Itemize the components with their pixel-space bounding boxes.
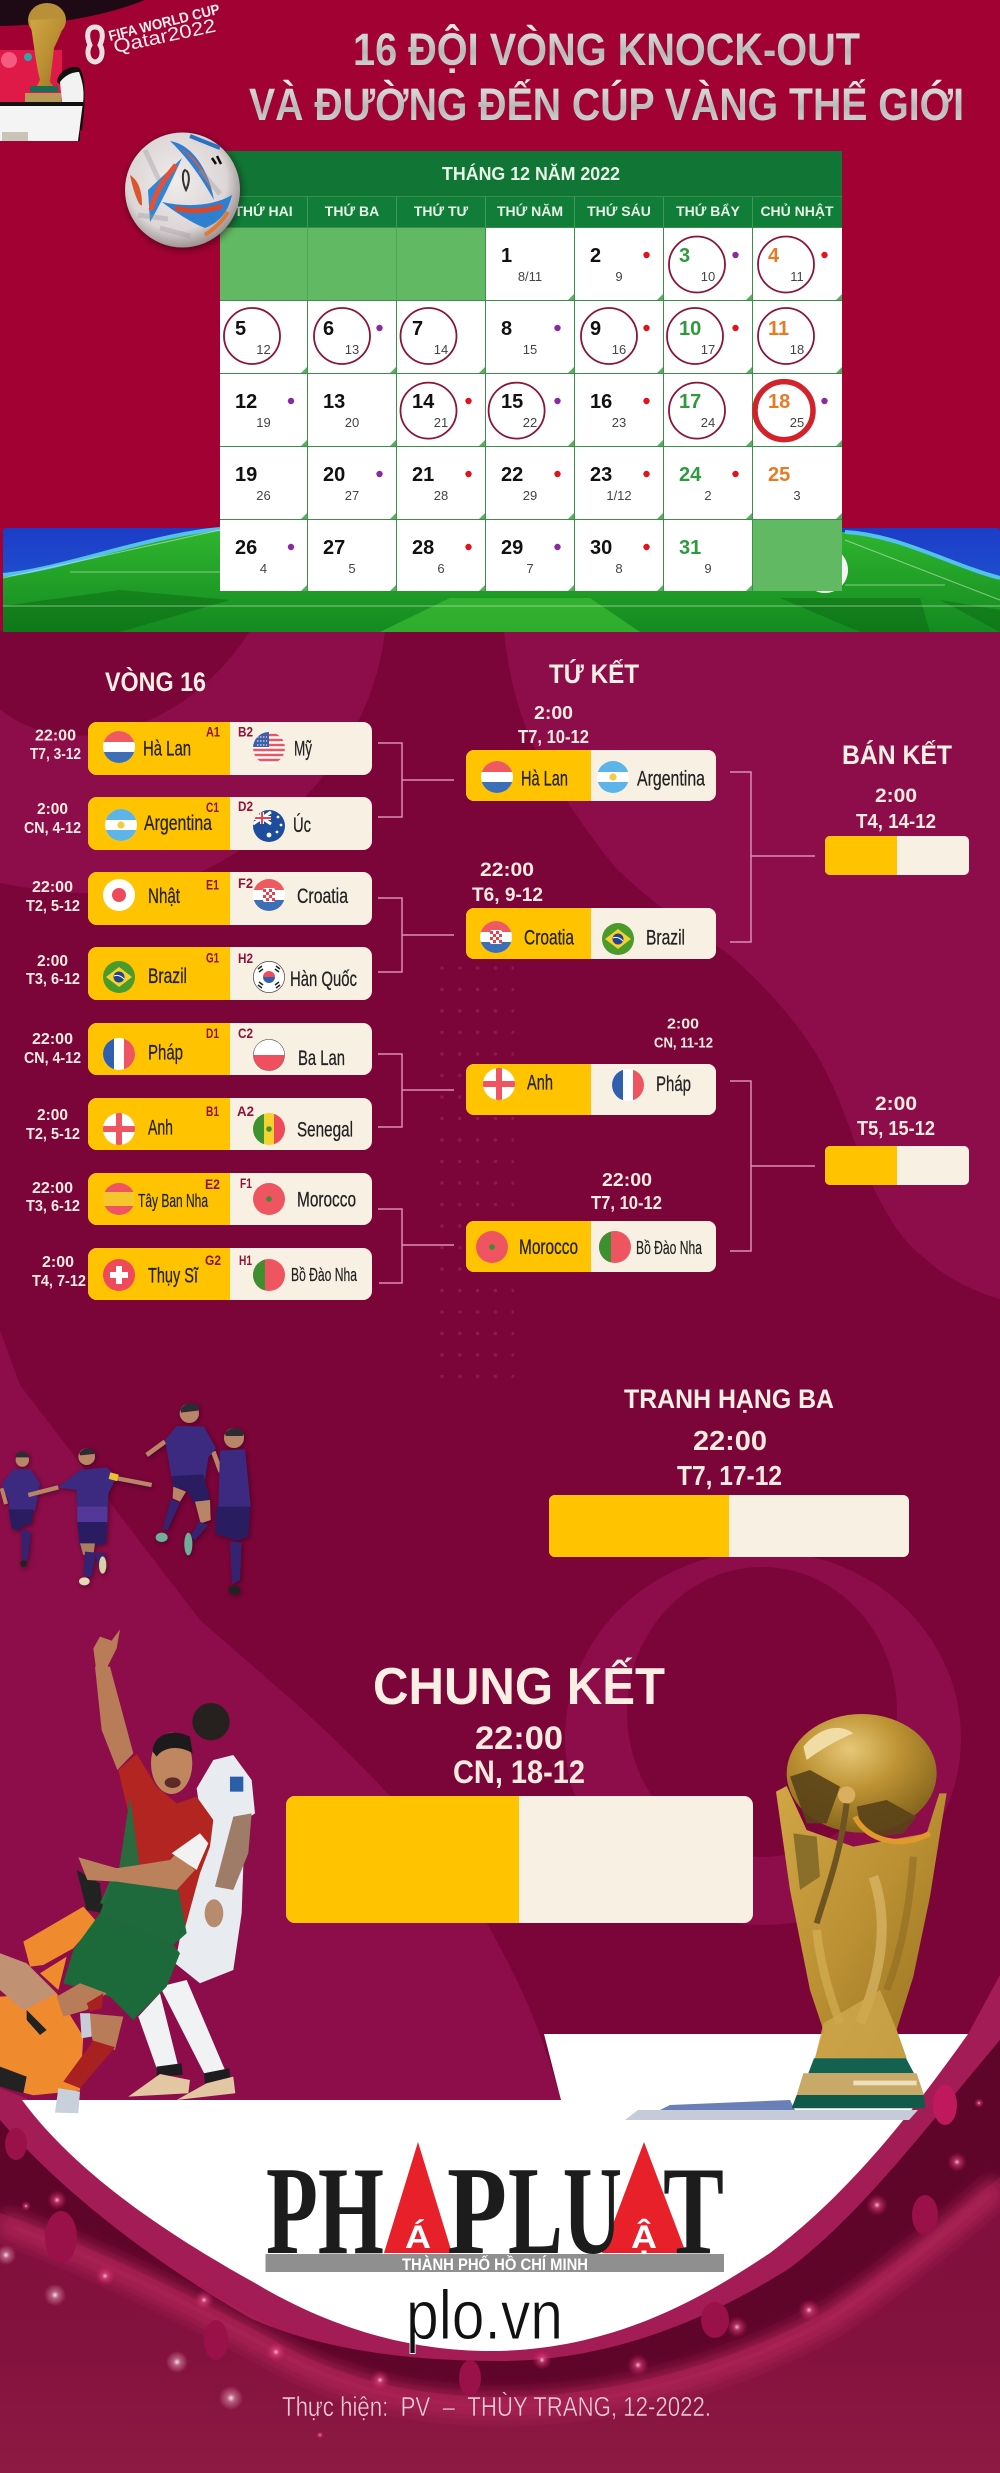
- match: Tây Ban Nha vs Morocco: E2: [205, 1177, 220, 1192]
- calendar week 3: 21: [434, 415, 448, 430]
- calendar week 4: 25: [768, 464, 790, 486]
- logo: Pháp Luật TP.HCM: LU: [508, 2142, 622, 2281]
- match: Hà Lan vs Mỹ: B2: [238, 724, 253, 740]
- match: Brazil vs Hàn Quốc: 2:00: [37, 953, 68, 970]
- calendar header: THỨ NĂM: [497, 202, 563, 219]
- calendar week 1: 3: [679, 245, 690, 267]
- calendar header: THÁNG 12 NĂM 2022: [442, 163, 620, 184]
- calendar week 4: 28: [434, 488, 448, 503]
- white footer panel: [22, 2034, 968, 2351]
- quarter-final: Anh vs Pháp: Anh: [527, 1072, 553, 1094]
- match: Brazil vs Hàn Quốc: H2: [238, 951, 253, 966]
- final match: 22:00: [475, 1720, 563, 1756]
- calendar week 4: 23: [590, 464, 612, 486]
- photo: FIFA World Cup trophy with stand: [625, 1714, 947, 2120]
- calendar week 5: 30: [590, 537, 612, 559]
- calendar week 1: 4: [768, 245, 780, 267]
- match: Tây Ban Nha vs Morocco: T3, 6-12: [26, 1198, 80, 1215]
- match: Nhật vs Croatia: Nhật: [148, 885, 180, 908]
- stadium pitch banner: [3, 528, 1000, 632]
- calendar week 2: 15: [523, 342, 537, 357]
- final match: [286, 1657, 753, 1923]
- round of 16 heading: VÒNG 16: [105, 666, 206, 697]
- calendar week 4: 20: [323, 464, 345, 486]
- match: Hà Lan vs Mỹ: [30, 722, 372, 775]
- calendar header: THỨ HAI: [234, 202, 293, 219]
- logo: Pháp Luật TP.HCM: THÀNH PHỐ HỒ CHÍ MINH: [402, 2254, 588, 2274]
- logo: Pháp Luật TP.HCM: [266, 2142, 724, 2281]
- match: Thụy Sĩ vs Bồ Đào Nha: T4, 7-12: [32, 1273, 86, 1290]
- match: Anh vs Senegal: B1: [206, 1104, 219, 1119]
- calendar week 1: 8/11: [518, 269, 542, 284]
- quarter-final: Croatia vs Brazil: T6, 9-12: [472, 885, 543, 906]
- match: Hà Lan vs Mỹ: Hà Lan: [143, 738, 191, 760]
- match: Argentina vs Úc: Argentina: [144, 812, 212, 835]
- match: Anh vs Senegal: A2: [237, 1104, 254, 1119]
- semi-final 2: [825, 1094, 969, 1185]
- match: Tây Ban Nha vs Morocco: [26, 1173, 372, 1225]
- calendar week 2: 8: [501, 318, 512, 340]
- match: Anh vs Senegal: Anh: [148, 1116, 173, 1140]
- match: Brazil vs Hàn Quốc: Brazil: [148, 965, 187, 988]
- match: Hà Lan vs Mỹ: Mỹ: [294, 738, 312, 760]
- calendar week 4: 27: [345, 488, 359, 503]
- calendar week 4: 22: [501, 464, 523, 486]
- calendar header: THỨ BẨY: [676, 202, 741, 219]
- quarter-final: Anh vs Pháp: CN, 11-12: [654, 1035, 713, 1052]
- FIFA World Cup Qatar 2022 logo: [88, 2, 222, 62]
- match: Argentina vs Úc: C1: [206, 800, 219, 815]
- match: Pháp vs Ba Lan: [24, 1023, 372, 1075]
- calendar header: THỨ SÁU: [587, 202, 651, 219]
- match: Brazil vs Hàn Quốc: Hàn Quốc: [290, 968, 357, 991]
- match: Nhật vs Croatia: F2: [238, 876, 253, 891]
- calendar: December 2022: [220, 151, 842, 591]
- calendar week 5: 27: [323, 537, 345, 559]
- semi-final 1: 2:00: [875, 786, 917, 807]
- third place match: T7, 17-12: [677, 1460, 782, 1491]
- third place match: TRANH HẠNG BA: [624, 1384, 834, 1414]
- calendar week 5: 5: [348, 561, 356, 576]
- quarter-final: Croatia vs Brazil: Croatia: [524, 926, 574, 950]
- calendar week 2: 18: [790, 342, 804, 357]
- match: Pháp vs Ba Lan: Ba Lan: [298, 1047, 345, 1070]
- match: Argentina vs Úc: Úc: [293, 814, 311, 837]
- quarter-final: Hà Lan vs Argentina: [466, 703, 716, 801]
- final match: CN, 18-12: [453, 1754, 585, 1790]
- match: Argentina vs Úc: 2:00: [37, 801, 68, 818]
- match: Argentina vs Úc: D2: [238, 799, 253, 814]
- calendar week 3: 24: [701, 415, 715, 430]
- quarter-final: Anh vs Pháp: 2:00: [667, 1016, 699, 1032]
- calendar week 5: 31: [679, 537, 701, 559]
- quarter-final: Morocco vs Bồ Đào Nha: [466, 1170, 716, 1272]
- calendar header: THỨ TƯ: [414, 202, 469, 219]
- quarter-final: Hà Lan vs Argentina: Argentina: [637, 768, 705, 790]
- quarter-final: Anh vs Pháp: Pháp: [656, 1073, 691, 1096]
- calendar week 5: 8: [615, 561, 623, 576]
- website address: plo.vn: [406, 2276, 563, 2354]
- logo: Pháp Luật TP.HCM: PH: [266, 2142, 384, 2281]
- background: crimson top: [0, 0, 1000, 632]
- calendar week 5: 4: [260, 561, 267, 576]
- calendar week 3: 19: [256, 415, 271, 430]
- match: Nhật vs Croatia: Croatia: [297, 885, 348, 908]
- quarter-final: Croatia vs Brazil: [466, 860, 716, 959]
- logo: Pháp Luật TP.HCM: P: [447, 2142, 507, 2281]
- calendar week 2: 14: [434, 342, 448, 357]
- bracket connectors: [378, 743, 815, 1283]
- match: Brazil vs Hàn Quốc: T3, 6-12: [26, 971, 80, 988]
- calendar week 2: 9: [590, 318, 601, 340]
- logo: Pháp Luật TP.HCM: Ậ: [631, 2219, 657, 2255]
- logo: Pháp Luật TP.HCM: Á: [405, 2219, 431, 2255]
- calendar week 4: 2: [704, 488, 712, 503]
- FIFA World Cup Qatar 2022 logo: FIFA WORLD CUP: [107, 2, 222, 45]
- calendar header: CHỦ NHẬT: [760, 202, 834, 219]
- photo: Argentina players celebrating: [2, 1403, 251, 1595]
- match: Nhật vs Croatia: E1: [206, 878, 219, 893]
- calendar week 2: 7: [412, 318, 423, 340]
- calendar week 1: 11: [790, 269, 804, 284]
- quarter-final: Hà Lan vs Argentina: T7, 10-12: [518, 727, 589, 747]
- calendar week 3: 22: [523, 415, 537, 430]
- calendar week 2: 12: [256, 342, 271, 357]
- calendar week 1: 1: [501, 245, 512, 267]
- calendar week 1: [501, 236, 828, 292]
- icon: Al Rihla football: [125, 132, 240, 248]
- match: Thụy Sĩ vs Bồ Đào Nha: 2:00: [42, 1254, 74, 1271]
- calendar week 2: 16: [612, 342, 626, 357]
- calendar week 4: 1/12: [606, 488, 632, 503]
- semi-final 2: 2:00: [875, 1094, 917, 1115]
- match: Nhật vs Croatia: 22:00: [32, 879, 73, 896]
- calendar week 3: 23: [612, 415, 626, 430]
- match: Pháp vs Ba Lan: CN, 4-12: [24, 1050, 81, 1067]
- quarter-final: Hà Lan vs Argentina: 2:00: [534, 703, 573, 723]
- match: Argentina vs Úc: CN, 4-12: [24, 820, 81, 837]
- match: Hà Lan vs Mỹ: 22:00: [35, 728, 76, 744]
- calendar week 3: 16: [590, 391, 612, 413]
- calendar week 3: 13: [323, 391, 345, 413]
- semi-final 1: T4, 14-12: [856, 811, 936, 833]
- quarter-final: Anh vs Pháp: [466, 1016, 716, 1115]
- calendar week 5: 29: [501, 537, 523, 559]
- calendar week 4: 24: [679, 464, 702, 486]
- calendar week 2: [224, 308, 814, 364]
- match: Tây Ban Nha vs Morocco: Tây Ban Nha: [138, 1191, 209, 1211]
- quarter-final heading: TỨ KẾT: [549, 658, 639, 689]
- calendar week 2: 5: [235, 318, 246, 340]
- logo: Pháp Luật TP.HCM: T: [663, 2142, 724, 2281]
- calendar header: THỨ BA: [325, 202, 379, 219]
- quarter-final: Morocco vs Bồ Đào Nha: 22:00: [602, 1170, 652, 1190]
- calendar week 1: 2: [590, 245, 601, 267]
- match: Argentina vs Úc: [24, 797, 372, 850]
- match: Thụy Sĩ vs Bồ Đào Nha: Thụy Sĩ: [148, 1264, 199, 1288]
- calendar week 1: 10: [701, 269, 715, 284]
- calendar week 5: 6: [437, 561, 445, 576]
- calendar week 5: 28: [412, 537, 434, 559]
- semi-final 2: T5, 15-12: [857, 1118, 935, 1140]
- match: Pháp vs Ba Lan: Pháp: [148, 1042, 183, 1064]
- calendar week 3: 17: [679, 391, 701, 413]
- calendar week 4: 29: [523, 488, 537, 503]
- match: Tây Ban Nha vs Morocco: Morocco: [297, 1188, 356, 1212]
- background: purple swirl area: [0, 631, 1000, 2473]
- FIFA World Cup photo: trophy and podium: [0, 0, 145, 141]
- match: Pháp vs Ba Lan: 22:00: [32, 1031, 73, 1048]
- match: Thụy Sĩ vs Bồ Đào Nha: H1: [239, 1253, 252, 1268]
- calendar week 3: 12: [235, 391, 257, 413]
- calendar week 3: 14: [412, 391, 435, 413]
- quarter-final: Morocco vs Bồ Đào Nha: Morocco: [519, 1236, 578, 1259]
- calendar week 3: 25: [790, 415, 804, 430]
- calendar week 5: 7: [526, 561, 534, 576]
- third place match: [549, 1384, 909, 1557]
- semi-final heading: BÁN KẾT: [842, 739, 952, 770]
- quarter-final: Croatia vs Brazil: Brazil: [646, 926, 685, 950]
- match: Thụy Sĩ vs Bồ Đào Nha: G2: [205, 1253, 221, 1268]
- calendar week 4: 3: [793, 488, 801, 503]
- semi-final 1: [825, 786, 969, 875]
- calendar header: [220, 151, 842, 227]
- calendar week 3: 20: [345, 415, 359, 430]
- calendar week 3: 18: [768, 391, 790, 413]
- calendar week 2: 17: [701, 342, 715, 357]
- calendar week 2: 10: [679, 318, 701, 340]
- calendar cell backgrounds: [220, 228, 842, 591]
- calendar week 4: 19: [235, 464, 257, 486]
- match: Nhật vs Croatia: T2, 5-12: [26, 898, 80, 915]
- calendar week 2: 11: [768, 318, 789, 340]
- match: Thụy Sĩ vs Bồ Đào Nha: [32, 1248, 372, 1300]
- title: [249, 24, 964, 130]
- match: Nhật vs Croatia: [26, 872, 372, 925]
- match: Hà Lan vs Mỹ: A1: [206, 724, 220, 740]
- match: Brazil vs Hàn Quốc: [26, 947, 372, 1000]
- calendar week 4: 21: [412, 464, 434, 486]
- match: Pháp vs Ba Lan: D1: [206, 1026, 219, 1041]
- match: Tây Ban Nha vs Morocco: F1: [240, 1176, 252, 1191]
- quarter-final: Morocco vs Bồ Đào Nha: Bồ Đào Nha: [636, 1238, 703, 1258]
- match: Thụy Sĩ vs Bồ Đào Nha: Bồ Đào Nha: [291, 1265, 358, 1285]
- calendar week 2: 6: [323, 318, 334, 340]
- match: Anh vs Senegal: Senegal: [297, 1118, 353, 1142]
- match: Anh vs Senegal: [26, 1098, 372, 1150]
- calendar week 3: 15: [501, 391, 523, 413]
- FIFA World Cup Qatar 2022 logo: Qatar2022: [112, 16, 218, 58]
- photo: Portugal and Uruguay players with goalkeeper: [0, 1629, 255, 2113]
- match: Anh vs Senegal: 2:00: [37, 1107, 68, 1124]
- quarter-final: Hà Lan vs Argentina: Hà Lan: [521, 768, 568, 790]
- match: Hà Lan vs Mỹ: T7, 3-12: [30, 746, 81, 763]
- match: Brazil vs Hàn Quốc: G1: [206, 950, 219, 965]
- credit line: Thực hiện: PV – THÙY TRANG, 12-2022.: [282, 2391, 711, 2422]
- match: Anh vs Senegal: T2, 5-12: [26, 1126, 80, 1143]
- calendar week 1: 9: [615, 269, 623, 284]
- third place match: 22:00: [693, 1425, 767, 1456]
- quarter-final: Morocco vs Bồ Đào Nha: T7, 10-12: [591, 1193, 662, 1213]
- match: Pháp vs Ba Lan: C2: [238, 1026, 253, 1041]
- match: Tây Ban Nha vs Morocco: 22:00: [32, 1180, 73, 1197]
- calendar week 5: 26: [235, 537, 257, 559]
- title: 16 ĐỘI VÒNG KNOCK-OUT: [353, 24, 860, 75]
- quarter-final: Croatia vs Brazil: 22:00: [480, 860, 534, 881]
- calendar week 4: 26: [256, 488, 271, 503]
- calendar week 5: [235, 537, 712, 576]
- calendar week 3: [235, 382, 828, 440]
- calendar week 2: 13: [345, 342, 359, 357]
- bottom decorative arcs with bokeh lights: [0, 1975, 1000, 2473]
- calendar week 4: [235, 464, 801, 503]
- final match: CHUNG KẾT: [373, 1657, 665, 1716]
- calendar week 5: 9: [704, 561, 712, 576]
